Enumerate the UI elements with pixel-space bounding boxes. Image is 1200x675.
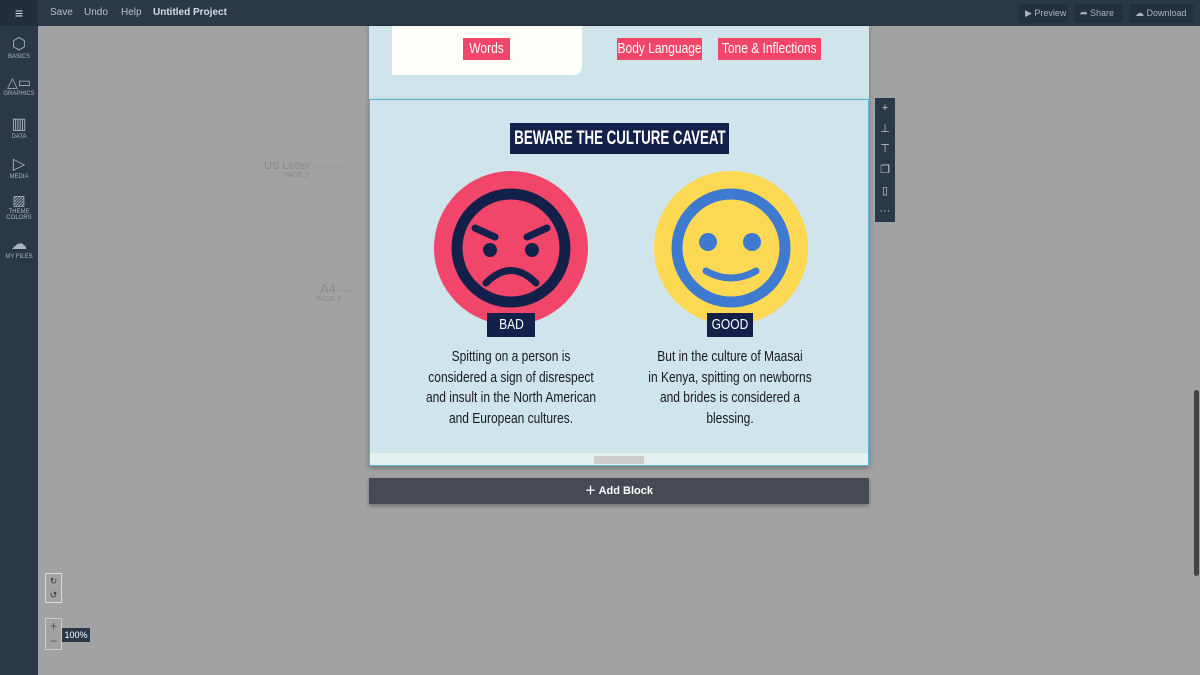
white box: [392, 26, 582, 75]
title: [510, 123, 729, 154]
menu icon: ≡: [15, 5, 23, 21]
right toolbar: ❐: [880, 164, 890, 176]
right toolbar: ⊥: [880, 123, 890, 135]
A4 label: [316, 281, 353, 303]
rotate controls: ↻: [50, 576, 57, 586]
right toolbar: [875, 98, 895, 222]
title: BEWARE THE CULTURE CAVEAT: [514, 128, 725, 149]
preview button: [1019, 4, 1068, 23]
A4 label: A4 -----: [320, 281, 353, 296]
share button: ➦ Share: [1080, 8, 1114, 18]
add block bar: [369, 478, 869, 504]
text bad: and European cultures.: [449, 410, 573, 427]
label bad: [487, 313, 535, 337]
download button: ☁ Download: [1135, 8, 1187, 18]
text bad: Spitting on a person is: [452, 348, 570, 365]
right toolbar: ···: [880, 205, 890, 217]
zoom +/-: −: [50, 634, 57, 648]
theme colors: ▨: [12, 192, 26, 208]
tag words: Words: [469, 40, 504, 57]
label good: [707, 313, 753, 337]
add block bar: ＋ Add Block: [585, 485, 653, 497]
text bad: and insult in the North American: [426, 389, 596, 406]
share button: [1074, 4, 1123, 23]
my files: ☁: [11, 236, 27, 253]
page size labels: US Letter --------: [264, 160, 343, 172]
zoom +/-: [45, 618, 62, 650]
zoom +/-: +: [50, 619, 57, 633]
zoom percent: 100%: [64, 630, 88, 640]
page size labels: PAGE 3: [284, 172, 309, 179]
project title: Untitled Project: [153, 7, 227, 18]
media: [9, 156, 28, 180]
text bad: [426, 348, 596, 427]
upper block: [369, 26, 869, 100]
icon: angry face: [434, 171, 588, 321]
graphics: △▭: [7, 74, 31, 90]
main block: culture caveat: [369, 99, 869, 466]
data: ▥: [11, 116, 27, 133]
right toolbar: ⊤: [880, 143, 890, 155]
A4 label: PAGE 3: [316, 296, 341, 303]
label bad: BAD: [499, 316, 523, 333]
text good: blessing.: [706, 410, 754, 427]
data: DATA: [11, 134, 27, 140]
top bar: [0, 0, 1200, 26]
preview button: ▶ Preview: [1025, 8, 1066, 18]
menu items: Undo: [84, 7, 108, 18]
basics: ⬡: [12, 36, 26, 53]
page size labels: [264, 160, 343, 179]
text good: [648, 348, 812, 427]
my files: [5, 236, 33, 260]
media: MEDIA: [9, 174, 28, 180]
graphics: [3, 74, 35, 97]
basics: BASICS: [8, 54, 30, 60]
text bad: considered a sign of disrespect: [428, 369, 594, 386]
scrollbar: [1194, 390, 1199, 576]
menu icon: [0, 0, 38, 26]
theme colors: [6, 192, 32, 221]
sidebar: [0, 26, 38, 675]
my files: MY FILES: [5, 254, 33, 260]
right toolbar: +: [882, 102, 888, 114]
text good: But in the culture of Maasai: [657, 348, 803, 365]
menu items: [50, 7, 142, 18]
icon: happy face: [654, 171, 808, 322]
graphics: GRAPHICS: [3, 91, 35, 97]
rotate controls: [45, 573, 62, 603]
label good: GOOD: [712, 316, 748, 333]
download button: [1129, 4, 1193, 23]
right toolbar: ▯: [882, 185, 888, 197]
menu items: Help: [121, 7, 142, 18]
media: ▷: [13, 156, 25, 173]
tag words: [463, 38, 510, 60]
text good: and brides is considered a: [660, 389, 800, 406]
tag body language: Body Language: [617, 40, 702, 57]
theme colors: COLORS: [6, 215, 32, 221]
basics: [8, 36, 30, 60]
tag tone: Tone & Inflections: [722, 40, 817, 57]
zoom percent: [62, 628, 90, 642]
theme colors: THEME: [8, 209, 30, 215]
bottom strip: [370, 453, 868, 465]
menu items: Save: [50, 7, 73, 18]
text good: in Kenya, spitting on newborns: [648, 369, 812, 386]
rotate controls: ↺: [50, 590, 57, 600]
